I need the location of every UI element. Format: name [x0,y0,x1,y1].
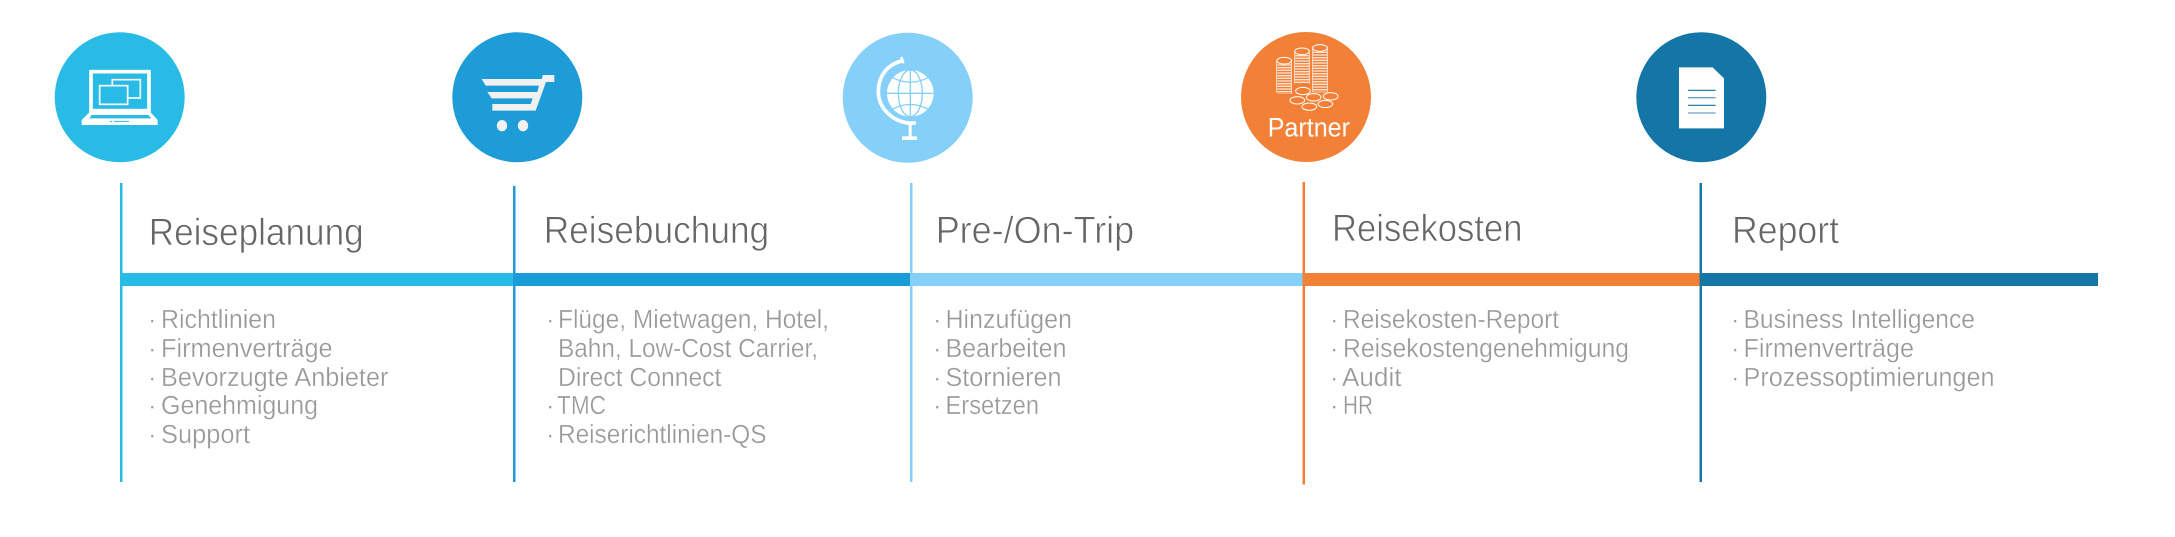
list: · [1330,392,1338,420]
list: Prozessoptimierungen [1744,364,1994,392]
list: · [933,364,942,392]
list: · [1731,364,1740,392]
panel: Report [1636,32,2098,482]
icon: shopping cart in blue circle [452,32,582,162]
panel: Reisebuchung [452,32,911,482]
heading: Reisekosten [1332,208,1522,250]
list: Hinzufügen [946,306,1072,334]
list: Bevorzugte Anbieter [161,364,389,392]
list: · [1731,306,1740,334]
list: · [933,306,942,334]
list [148,306,389,449]
list: · [933,335,942,363]
list: · [546,421,554,449]
icon: document in dark blue circle [1636,32,1766,162]
list: · [148,364,156,392]
list [546,306,829,449]
list: · [933,392,942,420]
panel: Pre-/On-Trip [843,33,1304,482]
list: Business Intelligence [1744,306,1975,334]
list: Bahn, Low-Cost Carrier, [558,335,818,363]
stage bar [911,273,1304,286]
list: · [148,421,156,449]
list: · [546,306,554,334]
stage line [120,183,122,482]
list: · [1330,335,1338,363]
panel: Reiseplanung [55,32,514,482]
icon: laptop in cyan circle [55,32,185,162]
list: Genehmigung [161,392,318,420]
list: TMC [557,392,606,420]
list: Reiserichtlinien-QS [558,421,766,449]
list: HR [1343,392,1373,420]
list [1731,306,1994,392]
list [1330,306,1629,420]
stage line [910,183,912,482]
list: Audit [1342,364,1402,392]
heading: Report [1732,210,1839,252]
list: Ersetzen [946,392,1039,420]
stage bar [1700,273,2098,286]
list: · [546,392,554,420]
icon: coins in orange circle with Partner label [1241,32,1371,162]
list: Reisekosten-Report [1343,306,1559,334]
stage line [1302,182,1305,484]
list: Direct Connect [558,364,721,392]
icon label: Partner [1268,112,1350,142]
heading: Pre-/On-Trip [936,210,1134,252]
heading: Reisebuchung [544,210,769,252]
stage bar [514,273,911,286]
list: Bearbeiten [946,335,1066,363]
list: Flüge, Mietwagen, Hotel, [558,306,829,334]
stage bar [1304,273,1700,286]
icon: globe in light blue circle [843,33,973,163]
heading: Reiseplanung [149,212,364,254]
list: Reisekostengenehmigung [1343,335,1629,363]
list: Support [161,421,250,449]
stage bar [121,273,514,286]
list: · [1330,364,1338,392]
stage line [513,186,516,482]
list: Richtlinien [161,306,276,334]
stage line [1700,183,1702,482]
list: · [148,306,156,334]
list: Firmenverträge [1744,335,1914,363]
list: · [1731,335,1740,363]
list: · [148,335,156,363]
list: · [1330,306,1338,334]
list [933,306,1072,420]
list: · [148,392,156,420]
list: Stornieren [946,364,1062,392]
panel: Reisekosten [1241,32,1700,484]
list: Firmenverträge [161,335,333,363]
